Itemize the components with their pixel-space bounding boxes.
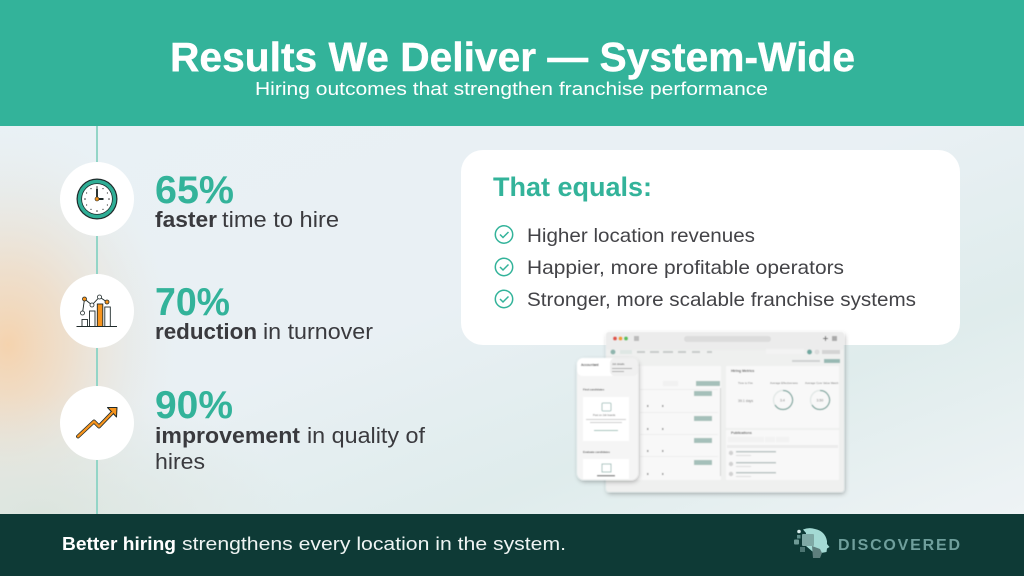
title: Results We Deliver — System-Wide (170, 34, 855, 80)
hiring metrics panel: Average Effectiveness (770, 381, 798, 385)
list item: revenues: Higher location revenues (527, 225, 755, 247)
stat label: faster (155, 207, 217, 232)
list item: franchise systems: Stronger, more scalable franchise systems (527, 289, 916, 311)
subtitle: Hiring outcomes that strengthen franchise performance (255, 78, 768, 99)
hiring metrics panel: Average Core Value Match (805, 381, 839, 385)
product screenshot: mobile view: Post on Job boards (593, 413, 616, 417)
product screenshot: mobile view: Evaluate candidates (583, 450, 610, 454)
stat label: reduction (155, 319, 257, 344)
logo wordmark: DISCOVERED (838, 537, 960, 554)
icon: rising arrow (60, 386, 134, 460)
stat label (155, 207, 339, 232)
icon: clock (60, 162, 134, 236)
stat label: time to hire (222, 207, 339, 232)
product screenshot: desktop dashboard (606, 332, 844, 492)
footer message: strengthens every location in the system. (182, 533, 566, 554)
stat label: in quality of (307, 423, 426, 448)
stat value: 70% (155, 281, 230, 324)
jobs panel (628, 366, 721, 480)
background (0, 125, 1024, 514)
stat: 70% reduction in turnover (60, 274, 373, 348)
product screenshot: mobile view: Accountant (581, 363, 599, 367)
stat value: 65% (155, 169, 234, 212)
product screenshot: mobile view (577, 358, 638, 480)
stat label (155, 423, 426, 474)
stat: 65% faster time to hire (60, 162, 339, 236)
list item: operators: Happier, more profitable operators (527, 257, 844, 279)
browser bar (606, 332, 844, 350)
hiring metrics panel: 39.1 days (738, 399, 753, 403)
timeline line (96, 126, 98, 514)
product screenshot: mobile view: Job details (612, 362, 625, 366)
product screenshot: mobile view: Find candidates (583, 388, 605, 392)
hiring metrics panel: Time to Fire (738, 381, 753, 385)
hiring metrics panel: Hiring Metrics (731, 369, 754, 373)
footer band (0, 514, 1024, 576)
footer message: Better hiring (62, 533, 176, 554)
stat label: in turnover (263, 319, 373, 344)
stat label: hires (155, 449, 205, 474)
hiring metrics panel (726, 366, 839, 428)
hiring metrics panel: 3.50 (816, 398, 823, 402)
panel: that equals (461, 150, 960, 345)
logo: discovered (794, 528, 960, 558)
panel heading: That equals: (493, 172, 652, 202)
stat label (155, 319, 373, 344)
stat: 90% improvement in quality of hires (60, 384, 426, 474)
stat label: improvement (155, 423, 301, 448)
header band (0, 0, 1024, 126)
hiring metrics panel: 3.4 (780, 398, 785, 402)
footer message (62, 533, 566, 554)
nav row (610, 349, 840, 363)
publications panel (726, 430, 839, 480)
stat value: 90% (155, 384, 233, 427)
icon: bar chart (60, 274, 134, 348)
publications panel: Publications (731, 431, 752, 435)
